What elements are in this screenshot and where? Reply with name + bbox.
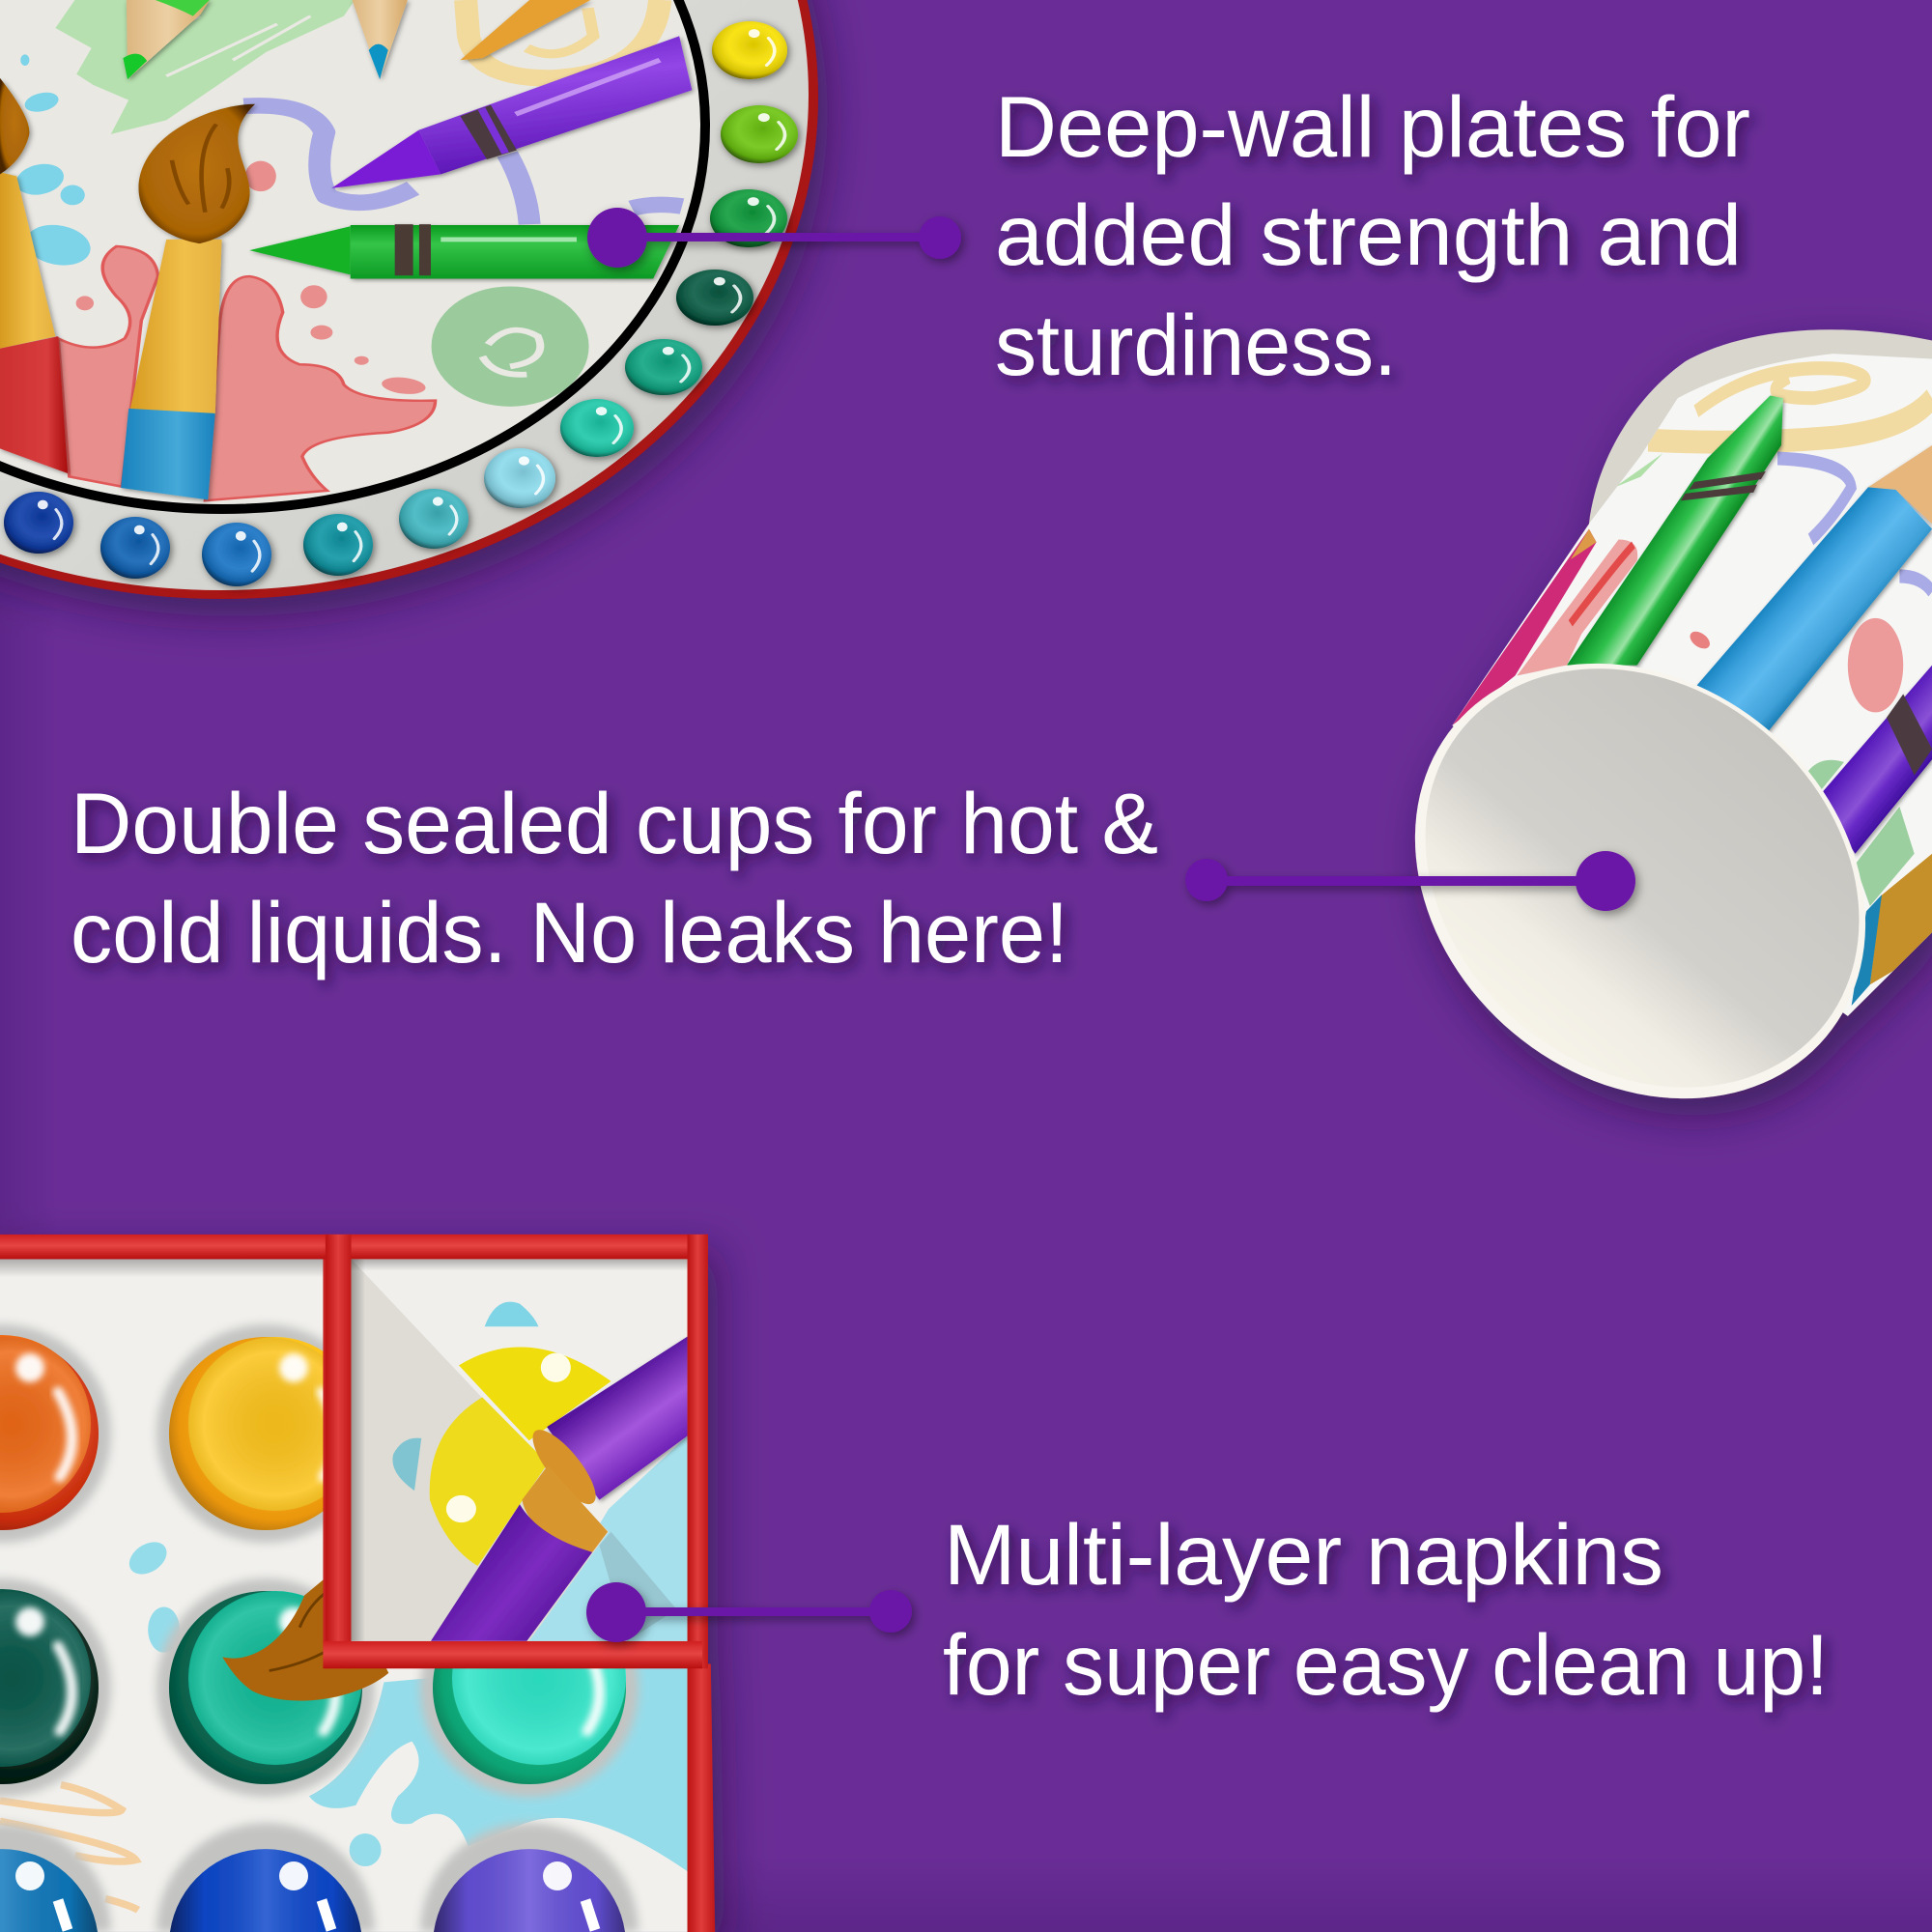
lavender scribble — [244, 105, 682, 224]
green scribble — [55, 0, 355, 134]
yellow swirl — [1648, 368, 1932, 442]
pink pencil — [1452, 529, 1597, 725]
callout text — [995, 78, 1750, 393]
callout text: for super easy clean up! — [943, 1616, 1829, 1713]
napkin colour balls — [0, 1324, 639, 1932]
bead: mid blue — [100, 517, 170, 579]
fold inner shadows — [352, 1259, 688, 1271]
bead: green — [710, 189, 787, 247]
ball: aqua — [433, 1591, 626, 1784]
left paintbrush — [0, 78, 68, 473]
red splash — [58, 161, 436, 500]
bead: teal — [303, 514, 373, 576]
yellow swirl — [466, 0, 660, 78]
plate inner ring — [0, 0, 705, 509]
plate paper — [0, 0, 705, 509]
orange crayon — [460, 0, 590, 60]
callout text: added strength and — [995, 186, 1742, 283]
yellow brush — [1870, 854, 1932, 984]
ball: royal blue — [170, 1849, 361, 1932]
purple brush handle lower — [431, 1504, 592, 1641]
blue splashes — [17, 54, 91, 266]
plate — [0, 0, 818, 599]
napkin paper — [0, 1259, 689, 1932]
blue pencil — [352, 0, 408, 79]
callout: cup — [71, 775, 1635, 980]
bead: dark green — [676, 270, 753, 326]
cup paper body — [1452, 354, 1932, 1016]
green crayon — [249, 224, 679, 279]
bead: yellow — [712, 21, 787, 79]
napkin orange scribble — [0, 1785, 138, 1910]
ball: amber — [169, 1337, 362, 1530]
ball: dark green — [0, 1589, 99, 1784]
plate colour beads — [4, 21, 798, 586]
cup artwork — [1452, 368, 1932, 1006]
bead: lime — [721, 105, 798, 163]
cup base rim — [1327, 574, 1932, 1188]
plate artwork — [0, 0, 692, 500]
bead: light teal — [399, 489, 469, 549]
cup — [1327, 329, 1932, 1188]
bead: navy — [4, 492, 73, 554]
purple brush handle upper — [547, 1337, 688, 1500]
callout text: Deep-wall plates for — [995, 78, 1750, 175]
ball: violet — [434, 1849, 625, 1932]
callout: plate — [587, 78, 1750, 393]
splash on fold — [485, 1302, 538, 1326]
cup far rim — [1589, 329, 1932, 524]
green pencil — [123, 0, 210, 79]
callout connector — [1185, 851, 1635, 911]
callout text: Multi-layer napkins — [944, 1506, 1663, 1603]
callout: napkin — [586, 1506, 1829, 1713]
green crayon — [1567, 395, 1783, 666]
napkin — [0, 1235, 715, 1932]
bead: sea green — [560, 399, 634, 457]
purple crayon — [1819, 666, 1932, 854]
fold paper — [352, 1259, 688, 1641]
plate rim — [0, 0, 818, 599]
ball: sky blue — [0, 1849, 98, 1932]
callout text: sturdiness. — [995, 297, 1397, 393]
ball halos — [0, 1324, 639, 1932]
ball: orange — [0, 1335, 99, 1530]
bead: pale cyan — [484, 448, 555, 508]
fold underside triangle — [352, 1259, 609, 1641]
folded napkin corner — [323, 1235, 708, 1668]
fold crease shadow — [599, 1532, 676, 1641]
bead: emerald — [625, 339, 702, 395]
callout text: cold liquids. No leaks here! — [71, 884, 1068, 980]
callout text — [943, 1506, 1829, 1713]
lavender and green marks — [1777, 458, 1852, 540]
green swirl — [432, 286, 589, 407]
ball: emerald — [169, 1591, 362, 1784]
purple crayon — [331, 36, 692, 188]
orange ferrule — [523, 1422, 606, 1513]
brush bristles — [222, 1568, 388, 1701]
callout text — [71, 775, 1158, 980]
blue pencil — [1696, 445, 1932, 736]
yellow ball halves — [459, 1347, 611, 1440]
red scribble and dabs — [1517, 540, 1637, 675]
napkin top and right border — [0, 1235, 715, 1932]
fold red frame — [323, 1235, 708, 1668]
bead: blue — [202, 523, 271, 586]
centre paintbrush — [121, 104, 255, 499]
callout connector — [587, 208, 961, 268]
callout connector — [586, 1582, 912, 1642]
cup base inner — [1341, 582, 1932, 1174]
callout text: Double sealed cups for hot & — [71, 775, 1158, 871]
napkin blue splash — [123, 1535, 688, 1871]
